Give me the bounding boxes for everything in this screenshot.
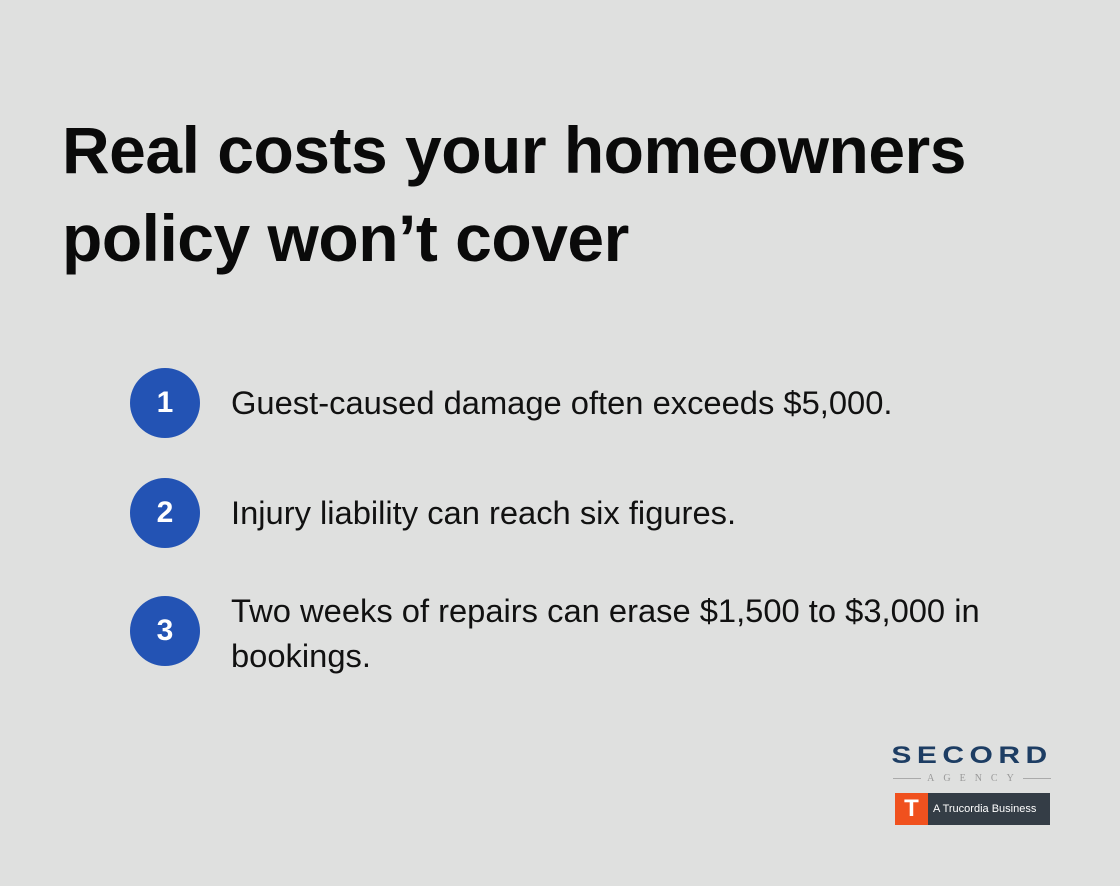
badge 1: 1 [157,386,173,419]
badge 1 [130,368,200,438]
item 1 [130,368,892,438]
logo agency: AGENCY [927,773,1023,784]
logo badge: A Trucordia Business [933,803,1036,815]
badge 3 [130,596,200,666]
text 3: Two weeks of repairs can erase $1,500 to $3,000 in bookings. [231,592,980,674]
item 3 [130,592,980,674]
badge 3: 3 [157,614,173,647]
text 2: Injury liability can reach six figures. [231,494,736,531]
logo wordmark: SECORD [891,742,1053,769]
logo [891,742,1053,825]
text 1: Guest-caused damage often exceeds $5,000. [231,384,892,421]
badge 2: 2 [157,496,173,529]
logo badge [895,793,1050,825]
logo badge: T [904,795,919,822]
badge 2 [130,478,200,548]
title: Real costs your homeowners [62,113,966,187]
title [62,113,966,275]
item 2 [130,478,736,548]
title: policy won’t cover [62,201,629,275]
